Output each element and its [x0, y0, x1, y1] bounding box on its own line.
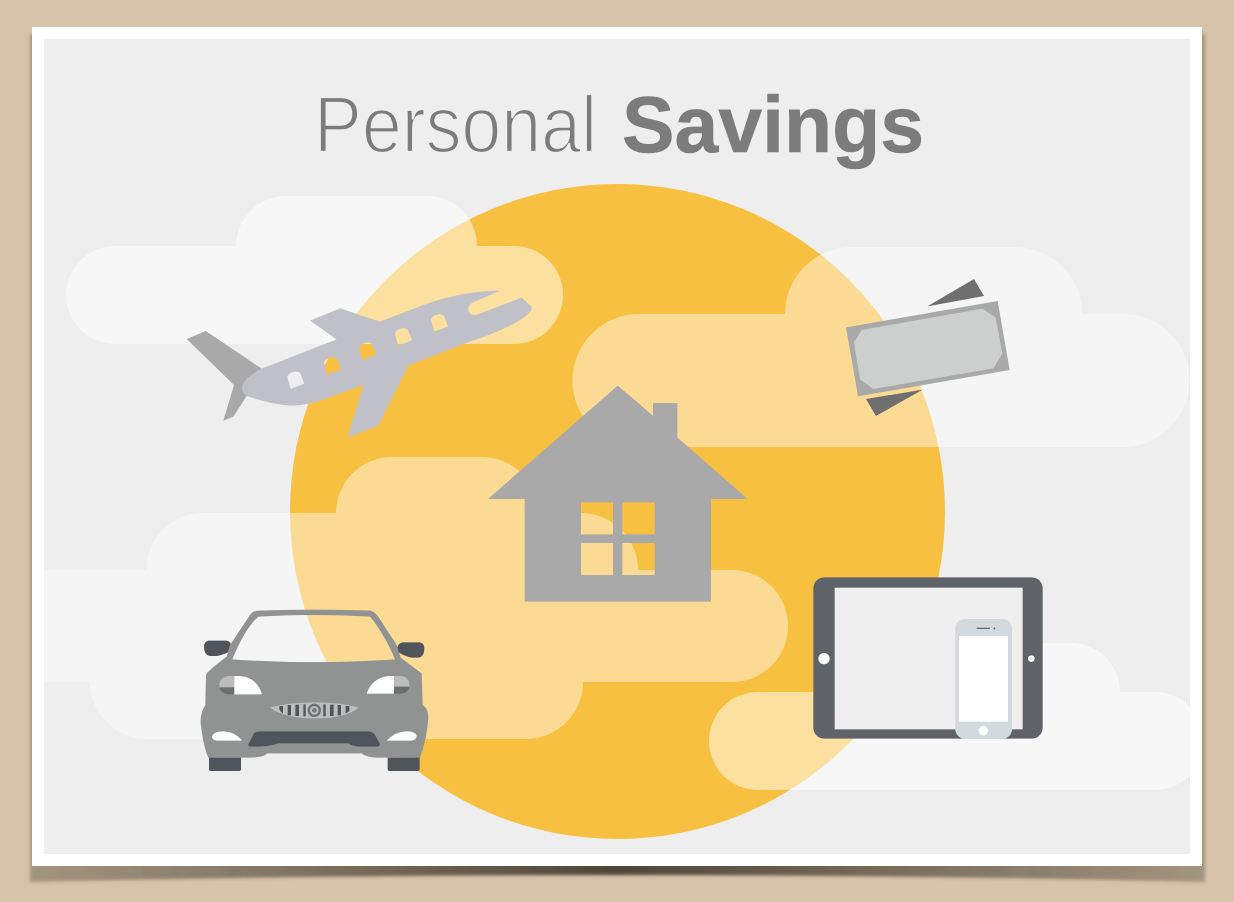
bill inner [854, 309, 1002, 389]
car lower intake [248, 731, 380, 747]
bill corner tab bottom [866, 390, 923, 416]
car fog lights [212, 731, 417, 741]
bill corner tab top [927, 279, 984, 306]
tablet buttons [818, 653, 1035, 664]
bill outer [846, 301, 1010, 396]
car mirrors [204, 641, 424, 658]
title: Savings [622, 80, 924, 169]
tablet screen [835, 588, 1023, 729]
car grille [270, 702, 359, 718]
cloud: top left [66, 196, 563, 344]
title [314, 80, 924, 169]
icon: airplane [187, 291, 532, 437]
icon: house [488, 386, 748, 602]
airplane body [242, 291, 532, 437]
car headlight right [367, 676, 409, 694]
title: Personal [314, 80, 597, 169]
airplane tail [187, 331, 262, 421]
icon: money bill [846, 279, 1010, 416]
icon: tablet and phone [813, 577, 1043, 739]
car body [201, 610, 428, 758]
cloud: right [572, 254, 939, 447]
car headlight left [219, 676, 262, 694]
tablet body [813, 577, 1043, 739]
cloud: lower right [709, 643, 1204, 790]
car wheels [209, 758, 420, 771]
phone [955, 619, 1012, 739]
icon: car [201, 610, 428, 771]
sun circle [290, 184, 945, 839]
cloud: lower left [290, 457, 788, 739]
clouds [30, 196, 1204, 790]
